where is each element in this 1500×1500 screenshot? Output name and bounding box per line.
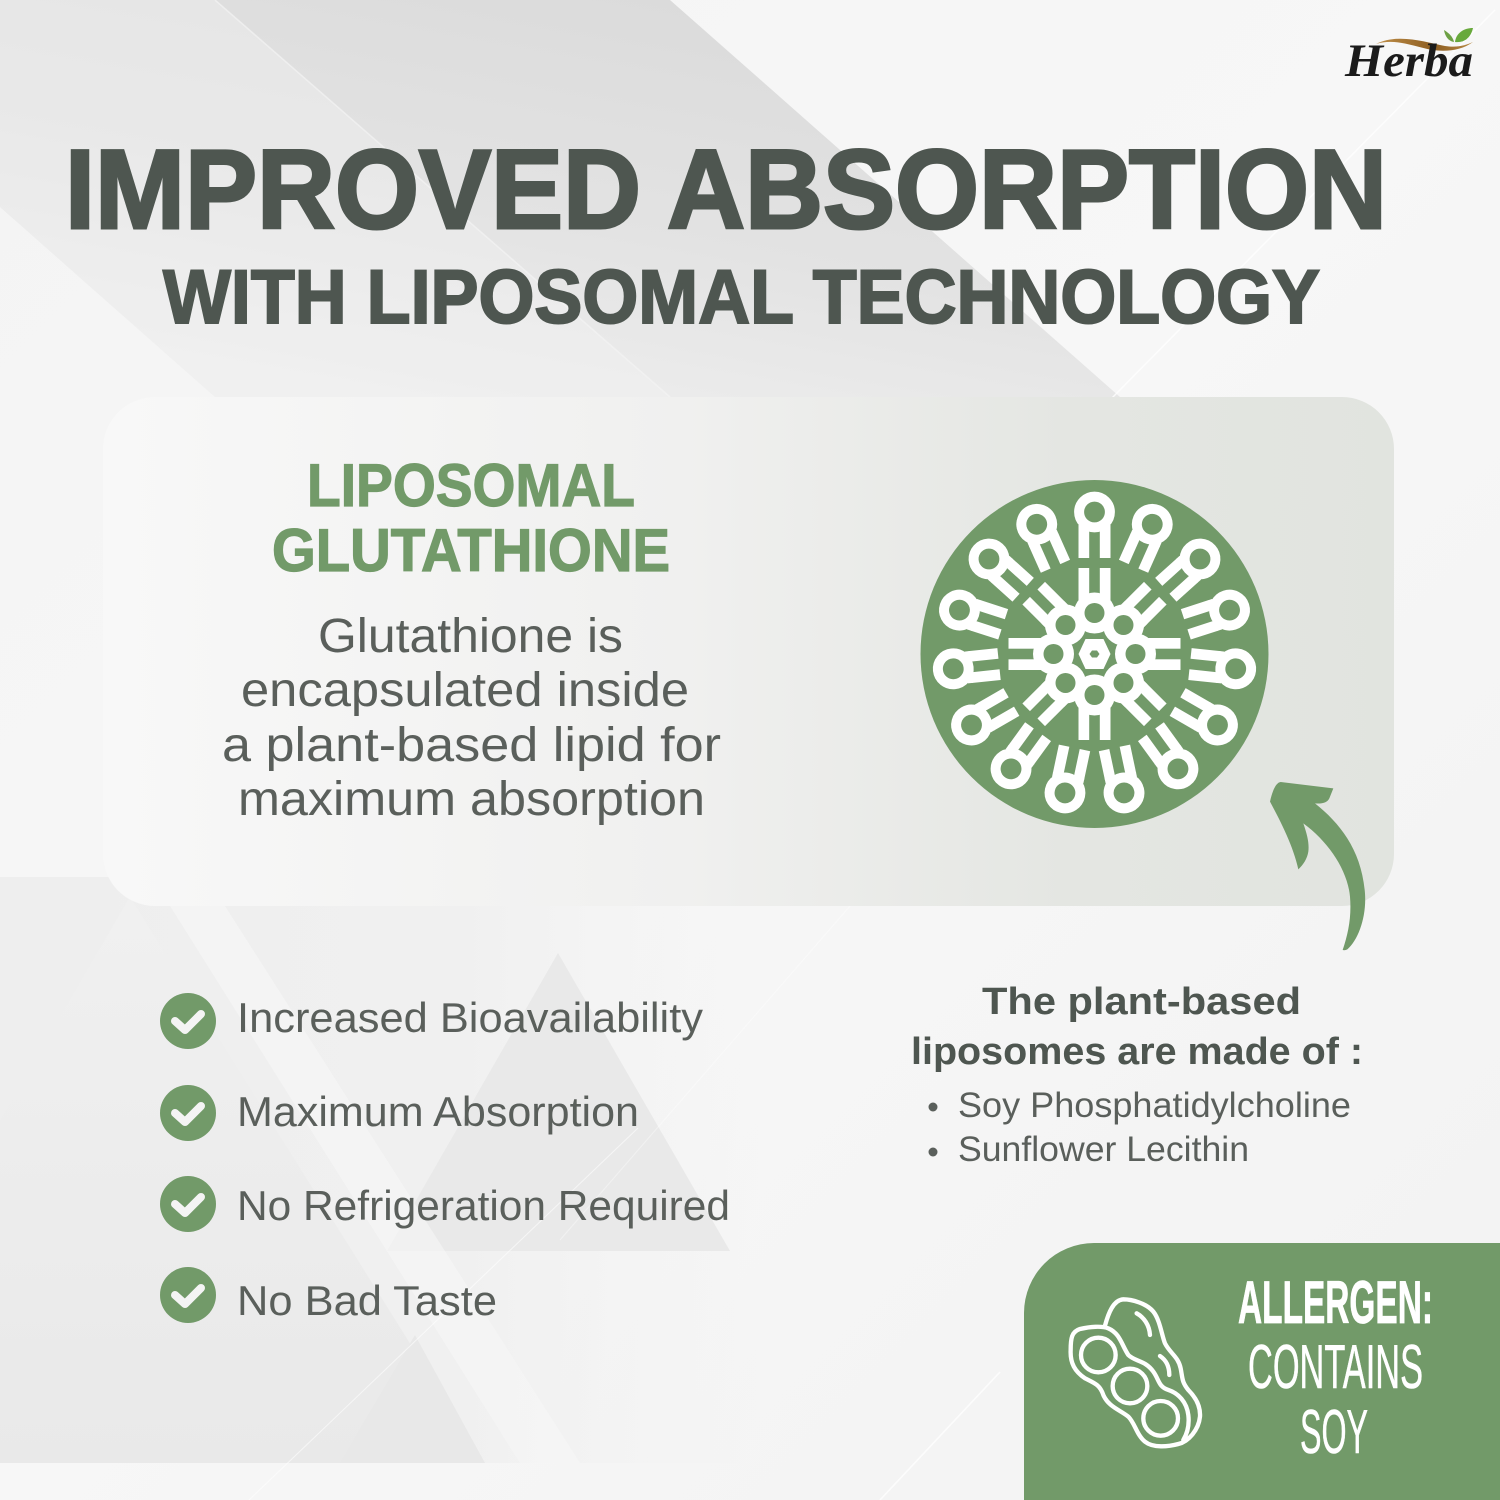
title line 1: IMPROVED ABSORPTION [65,127,1387,252]
benefit: no refrigeration required: No Refrigeration Required [237,1182,730,1229]
allergen text: SOY [1300,1398,1368,1467]
arrow [1270,782,1365,950]
benefit: no bad taste: No Bad Taste [237,1277,497,1324]
panel heading: GLUTATHIONE [272,517,670,584]
benefit: no bad taste [160,1267,497,1324]
allergen text [1238,1269,1433,1467]
icon: soybean pod [1071,1299,1200,1446]
benefit: increased bioavailability [160,993,703,1049]
logo swoosh [1376,39,1473,51]
ingredients heading: The plant-based [982,981,1301,1023]
panel: allergen [1024,1243,1500,1500]
panel heading: LIPOSOMAL [307,452,635,519]
ingredients heading [911,981,1363,1073]
icon: liposome [920,480,1268,828]
panel description: a plant-based lipid for [222,719,721,772]
benefit: maximum absorption [160,1085,639,1141]
ingredients list: Soy Phosphatidylcholine [958,1086,1351,1125]
benefit: maximum absorption: Maximum Absorption [237,1088,639,1135]
text block: liposome ingredients [911,981,1363,1169]
title line 2: WITH LIPOSOMAL TECHNOLOGY [163,255,1320,340]
ingredients list [928,1086,1351,1169]
checklist: benefits [160,993,730,1324]
panel description [222,610,721,826]
benefit: increased bioavailability: Increased Bioavailability [237,994,703,1041]
panel: liposomal glutathione [103,397,1394,906]
panel heading [272,452,670,584]
logo wordmark: Herba [1344,35,1473,87]
title [65,127,1387,340]
panel description: encapsulated inside [241,664,689,717]
panel description: maximum absorption [238,773,705,826]
logo leaves [1444,28,1473,42]
logo: Herba [1344,28,1473,87]
ingredients heading: liposomes are made of : [911,1031,1363,1073]
panel description: Glutathione is [318,610,623,663]
ingredients list: Sunflower Lecithin [958,1130,1249,1169]
